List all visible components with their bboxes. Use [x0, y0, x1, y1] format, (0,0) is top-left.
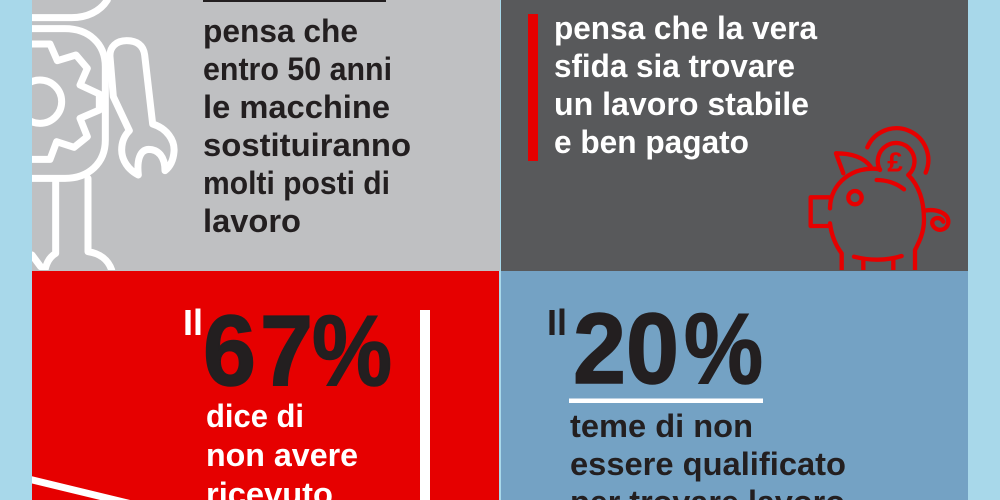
text: machines statement: le macchine — [203, 89, 390, 125]
text: machines statement: sostituiranno — [203, 127, 411, 163]
icon: piggy bank with coin — [811, 128, 948, 273]
text: machines statement: lavoro — [203, 203, 301, 239]
stat: Il 20% — [547, 293, 763, 405]
panel: 67% training — [20, 271, 499, 500]
red accent bar — [528, 14, 538, 161]
icon: robot with gear and wrench — [18, 0, 174, 270]
text: machines statement — [203, 13, 411, 239]
stat: Il 67%: 6 — [203, 295, 256, 407]
text: qualification statement: essere qualificato — [570, 446, 846, 482]
stat: Il 20%: 0 — [626, 293, 679, 405]
text: machines statement: entro 50 anni — [203, 51, 392, 87]
decorative white diagonal — [32, 476, 130, 500]
text: stable job statement: e ben pagato — [554, 124, 749, 160]
stat: Il 67% — [183, 295, 392, 407]
text: stable job statement: sfida sia trovare — [554, 48, 795, 84]
text: training statement — [206, 398, 358, 500]
stat: Il 20%: 2 — [573, 293, 626, 405]
panel: stable job challenge — [501, 0, 968, 273]
text: stable job statement: un lavoro stabile — [554, 86, 809, 122]
stat: Il 20%: % — [684, 293, 763, 405]
stat: Il 67%: % — [312, 295, 392, 407]
rule above text — [203, 0, 386, 2]
text: training statement: dice di — [206, 398, 304, 434]
text: machines statement: pensa che — [203, 13, 358, 49]
white vertical bar — [420, 310, 430, 500]
stat: Il 20%: Il — [547, 302, 567, 343]
white underline — [569, 398, 763, 403]
panel: 20% qualification — [501, 271, 968, 500]
text: machines statement: molti posti di — [203, 165, 390, 201]
icon: piggy bank with coin: £ — [887, 146, 903, 177]
text: stable job statement: pensa che la vera — [554, 10, 817, 46]
text: qualification statement: teme di non — [570, 408, 753, 444]
text: stable job statement — [554, 10, 817, 160]
panel: machines replacing jobs — [18, 0, 500, 271]
stat: Il 67%: 7 — [260, 295, 313, 407]
stat: Il 67%: Il — [183, 302, 203, 343]
text: training statement: non avere — [206, 437, 358, 473]
text: qualification statement — [570, 408, 846, 500]
